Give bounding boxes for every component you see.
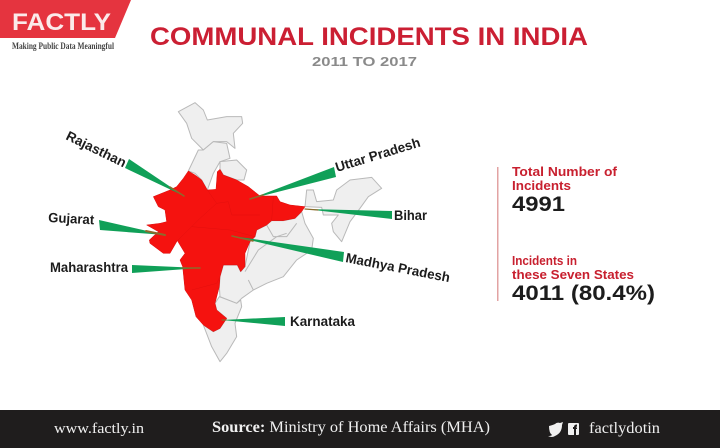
map: state borders inside highlighted area: [177, 190, 273, 290]
map: highlighted states: [147, 169, 305, 332]
stat: incidents in seven states: Incidents in: [512, 253, 577, 268]
label: Madhya Pradesh: Madhya Pradesh: [344, 250, 451, 285]
stat: incidents in seven states: these Seven States: [512, 267, 634, 282]
stat: total incidents: [512, 164, 618, 216]
pointer: Madhya Pradesh: [232, 236, 344, 262]
divider: [497, 167, 498, 301]
stat: total incidents: Total Number of: [512, 164, 618, 179]
subtitle: 2011 TO 2017: [312, 55, 417, 69]
stat: incidents in seven states: 4011 (80.4%): [512, 282, 655, 305]
pointer: Rajasthan: [125, 159, 184, 196]
label: Maharashtra: Maharashtra: [50, 260, 128, 275]
pointer: Gujarat: [99, 220, 165, 235]
label: Rajasthan: Rajasthan: [64, 128, 129, 170]
pointer: Bihar: [305, 209, 392, 219]
stat: total incidents: Incidents: [512, 178, 571, 193]
label: Gujarat: Gujarat: [48, 210, 95, 227]
label: Karnataka: Karnataka: [290, 314, 355, 329]
pointer tips over the map: [146, 187, 318, 320]
map of India: [147, 103, 382, 362]
footer: source: Source: Ministry of Home Affairs (MHA): [212, 419, 490, 436]
logo: Factly: [0, 0, 131, 51]
stat: incidents in seven states: [512, 253, 655, 305]
map: other states: [178, 103, 382, 362]
pointer: Maharashtra: [132, 265, 200, 273]
label: Uttar Pradesh: Uttar Pradesh: [333, 135, 422, 175]
pointers: green wedges: [99, 159, 392, 326]
pointer: Uttar Pradesh: [250, 167, 336, 199]
pointer: Karnataka: [222, 317, 285, 326]
footer: website: www.factly.in: [54, 421, 145, 437]
logo: Factly: FACTLY: [12, 9, 111, 36]
footer bar: [0, 410, 720, 448]
footer: handle: factlydotin: [589, 420, 660, 437]
icon: facebook: [568, 423, 579, 435]
logo: Factly: Making Public Data Meaningful: [12, 41, 114, 51]
label: Bihar: Bihar: [394, 208, 428, 223]
stat: total incidents: 4991: [512, 193, 565, 216]
title: COMMUNAL INCIDENTS IN INDIA: [150, 23, 588, 51]
icon: twitter: [548, 422, 563, 437]
